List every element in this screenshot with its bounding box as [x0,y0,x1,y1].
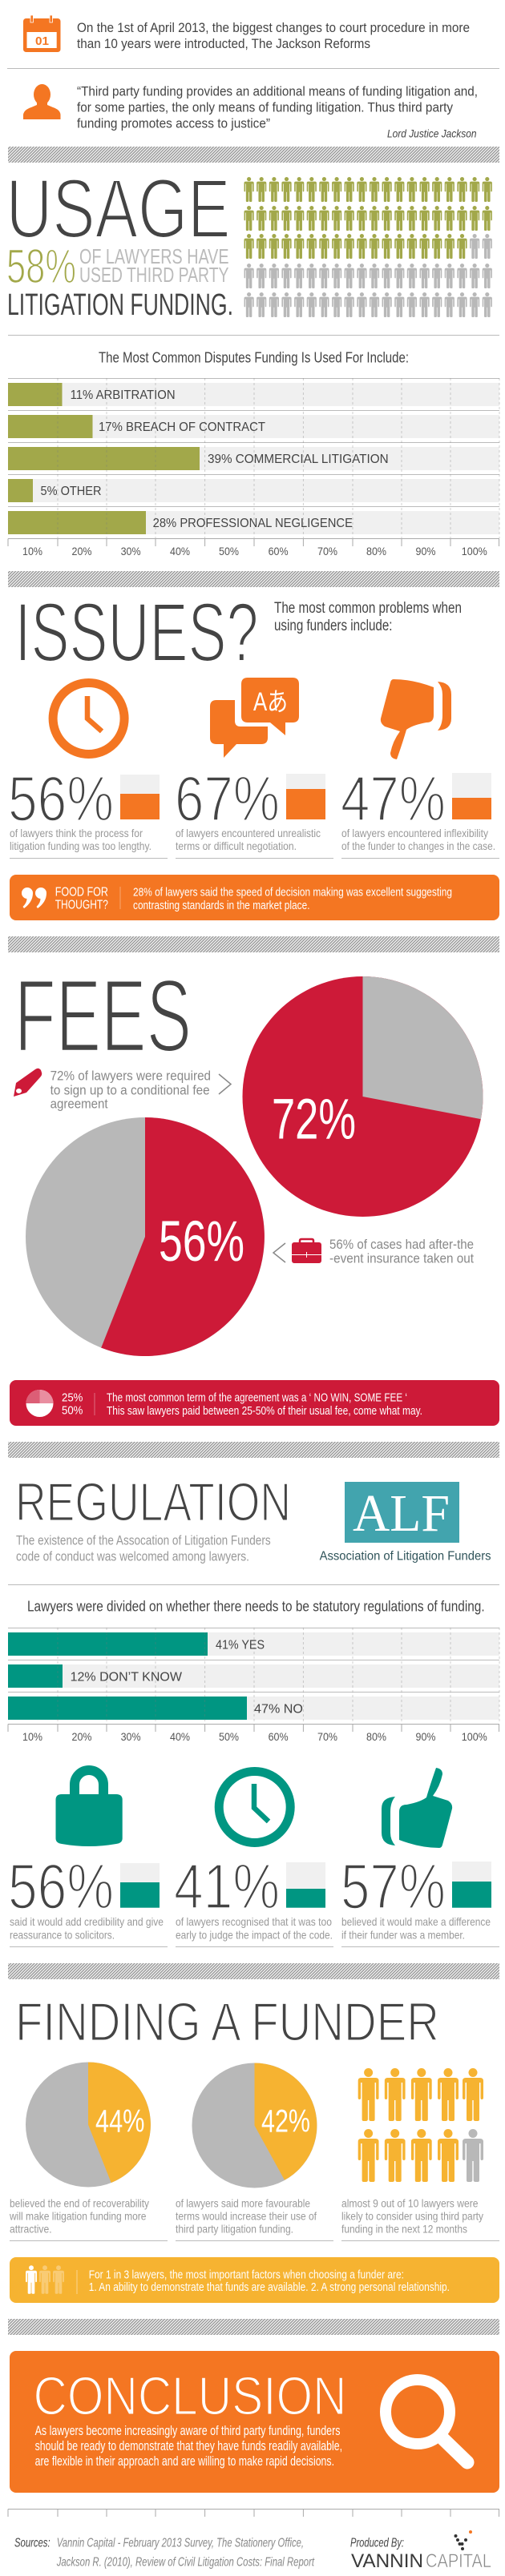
sources: Jackson R. (2010), Review of Civil Litigation Costs: Final Report [56,2555,314,2569]
intro text: On the 1st of April 2013, the biggest changes to court procedure in more [77,20,470,35]
stat: 58%: 58% [6,239,76,293]
callout: no win some fee: 50% [62,1403,83,1418]
callout: food for thought [10,875,499,920]
bar chart: disputes: 28% PROFESSIONAL NEGLIGENCE [153,517,353,530]
icon: clock [53,682,124,755]
icon: briefcase [292,1239,321,1263]
pie chart: 44%: 44% [95,2104,144,2139]
pie chart: 42% [192,2063,317,2188]
text: after the event insurance [329,1238,474,1266]
text: next 12 months [341,2196,483,2235]
stat: 41% too early: of lawyers recognised that it was too [176,1915,332,1928]
heading: conclusion: CONCLUSION [34,2366,346,2427]
callout: food for thought: FOOD FOR [55,885,108,899]
text: next 12 months: funding in the next 12 months [341,2222,467,2235]
callout: food for thought: contrasting standards in the market place. [133,900,309,912]
stat: 47% inflexibility: 47% [341,763,446,835]
stat: 56% lengthy: 56% [8,763,114,835]
panel: fees [10,958,499,1426]
callout: no win some fee: This saw lawyers paid between 25-50% of their usual fee, come what may. [107,1405,422,1418]
stat: 56% lengthy: of lawyers think the process for [10,827,143,839]
icon: calendar: 01 [35,34,49,48]
text: next 12 months: almost 9 out of 10 lawyers were [341,2196,479,2209]
text: favourable terms: of lawyers said more favourable [176,2196,310,2209]
pie chart: 44% [26,2062,151,2187]
stat: 67% terms [175,763,325,852]
text: code of conduct [16,1532,271,1564]
text: conditional fee: 72% of lawyers were required [50,1069,211,1083]
stat: 47% inflexibility [341,763,495,852]
conclusion text: should be ready to demonstrate that they have funds readily available, [35,2438,342,2453]
stat: 57% member: if their funder was a member. [341,1928,465,1941]
icon: person bust [23,84,61,119]
heading: regulation: REGULATION [15,1472,291,1533]
logo: ALF: ALF [353,1484,450,1543]
text: conditional fee: agreement [50,1097,108,1112]
callout: 1 in 3 lawyers [10,2257,499,2303]
arrow: right [219,1074,231,1094]
stat: 67% terms: of lawyers encountered unrealistic [176,827,321,839]
usage sentence: LITIGATION FUNDING. [7,288,233,322]
arrow: left [273,1243,285,1262]
callout: 1 in 3 lawyers: For 1 in 3 lawyers, the most important factors when choosing a funder are: [89,2268,404,2281]
text: recoverability [9,2196,149,2235]
text: code of conduct: code of conduct was welcomed among lawyers. [16,1548,249,1564]
text: favourable terms [176,2196,317,2235]
stat: 56% credibility [8,1850,164,1941]
bar chart: disputes: 5% OTHER [40,485,101,498]
stat: 41% too early: 41% [174,1850,280,1922]
bar chart: statutory regulation: 41% YES [216,1639,265,1652]
conclusion text: As lawyers become increasingly aware of third party funding, funders [35,2423,340,2438]
icon: padlock [56,1770,123,1846]
bar chart: disputes: 11% ARBITRATION [71,388,176,402]
text: conditional fee [50,1069,211,1112]
heading: issues: ISSUES? [14,586,258,679]
text: conditional fee: to sign up to a conditional fee [50,1083,210,1097]
stat: 56% lengthy [8,763,160,852]
callout: food for thought: THOUGHT? [55,898,108,912]
pie chart: 72%: 72% [272,1089,356,1152]
pie chart: 56% [26,1117,265,1356]
chart title: disputes: The Most Common Disputes Funding Is Used For Include: [99,349,409,365]
quote: funding promotes access to justice” [77,115,270,131]
bar chart: statutory regulation [8,1628,499,1743]
logo: Vannin Capital [350,2530,491,2572]
stat: 57% member: 57% [341,1850,446,1922]
issues intro: The most common problems when [274,600,462,617]
stat: 41% too early [174,1850,333,1941]
sources: Sources: [14,2536,50,2550]
panel: regulation [8,1472,499,1946]
stat: 67% terms: 67% [175,763,280,835]
panel: conclusion [10,2351,499,2493]
text: recoverability: will make litigation funding more [9,2209,147,2222]
icon: magnifying glass [386,2380,467,2462]
intro text [77,20,470,51]
text: next 12 months: likely to consider using third party [341,2209,483,2222]
usage sentence [7,244,233,322]
sources [14,2536,314,2569]
text: favourable terms: terms would increase their use of [176,2209,317,2222]
stat: 56% credibility: said it would add credibility and give [10,1915,164,1928]
quote: for some parties, the only means of funding litigation. Thus third party [77,99,453,115]
panel: issues [8,586,499,920]
usage sentence: USED THIRD PARTY [79,263,229,287]
text: recoverability: believed the end of recoverability [10,2196,149,2209]
bar chart: disputes: 39% COMMERCIAL LITIGATION [208,453,389,466]
issues intro [274,600,462,634]
sources: Vannin Capital - February 2013 Survey, The Stationery Office, [57,2536,304,2550]
bar chart: statutory regulation: 47% NO [254,1703,303,1716]
pie chart: 42%: 42% [261,2104,310,2139]
logo: Vannin Capital: VANNIN [351,2550,423,2572]
bar chart: statutory regulation: 12% DON’T KNOW [71,1671,182,1684]
pie chart: 72% [242,976,483,1217]
stat: 56% lengthy: litigation funding was too lengthy. [10,839,152,852]
logo: Vannin Capital: CAPITAL [426,2550,491,2572]
usage sentence: OF LAWYERS HAVE [79,244,229,268]
panel: usage [6,162,492,322]
icon: pencil [14,1069,42,1097]
stat: 56% credibility: 56% [8,1850,114,1922]
icon: calendar [23,15,61,52]
conclusion text: are flexible in their approach and are willing to make rapid decisions. [35,2453,334,2469]
logo: ALF: Association of Litigation Funders [320,1550,491,1564]
conclusion text [35,2423,342,2469]
heading: fees: FEES [14,958,192,1073]
icon: translation bubbles [210,678,299,758]
stat: 67% terms: terms or difficult negotiation. [176,839,297,852]
icon: translation bubbles: Aあ [253,687,288,716]
pictogram: 9 of 10 lawyers [358,2068,483,2182]
stat: 41% too early: early to judge the impact of the code. [176,1928,333,1941]
bar chart: disputes: 17% BREACH OF CONTRACT [99,421,266,434]
intro text: than 10 years were introducted, The Jackson Reforms [77,36,370,51]
icon: clock teal [219,1772,290,1842]
pie chart: 56%: 56% [159,1210,244,1274]
callout: no win some fee [10,1380,499,1426]
text: code of conduct: The existence of the Assocation of Litigation Funders [16,1532,271,1548]
text: recoverability: attractive. [10,2222,52,2235]
issues intro: using funders include: [274,618,393,634]
text: after the event insurance: 56% of cases had after-the [329,1238,474,1252]
logo: ALF [320,1482,491,1564]
quote [77,83,478,139]
bar chart: disputes [8,378,499,557]
pictogram: 58 of 100 people [244,177,492,317]
quote: Lord Justice Jackson [387,127,477,139]
stat: 56% credibility: reassurance to solicitors. [10,1928,115,1941]
icon: thumbs up [382,1768,452,1848]
callout: no win some fee: The most common term of the agreement was a ‘ NO WIN, SOME FEE ‘ [107,1391,407,1404]
heading: usage: USAGE [6,162,231,256]
icon: thumbs down [381,679,451,759]
text: favourable terms: third party litigation funding. [176,2222,293,2235]
text: after the event insurance: -event insurance taken out [329,1252,474,1266]
panel: finding a funder [9,1991,499,2303]
stat: 57% member [341,1850,491,1941]
logo: Vannin Capital: Produced By: [350,2536,404,2550]
callout: no win some fee: 25% [62,1391,83,1405]
